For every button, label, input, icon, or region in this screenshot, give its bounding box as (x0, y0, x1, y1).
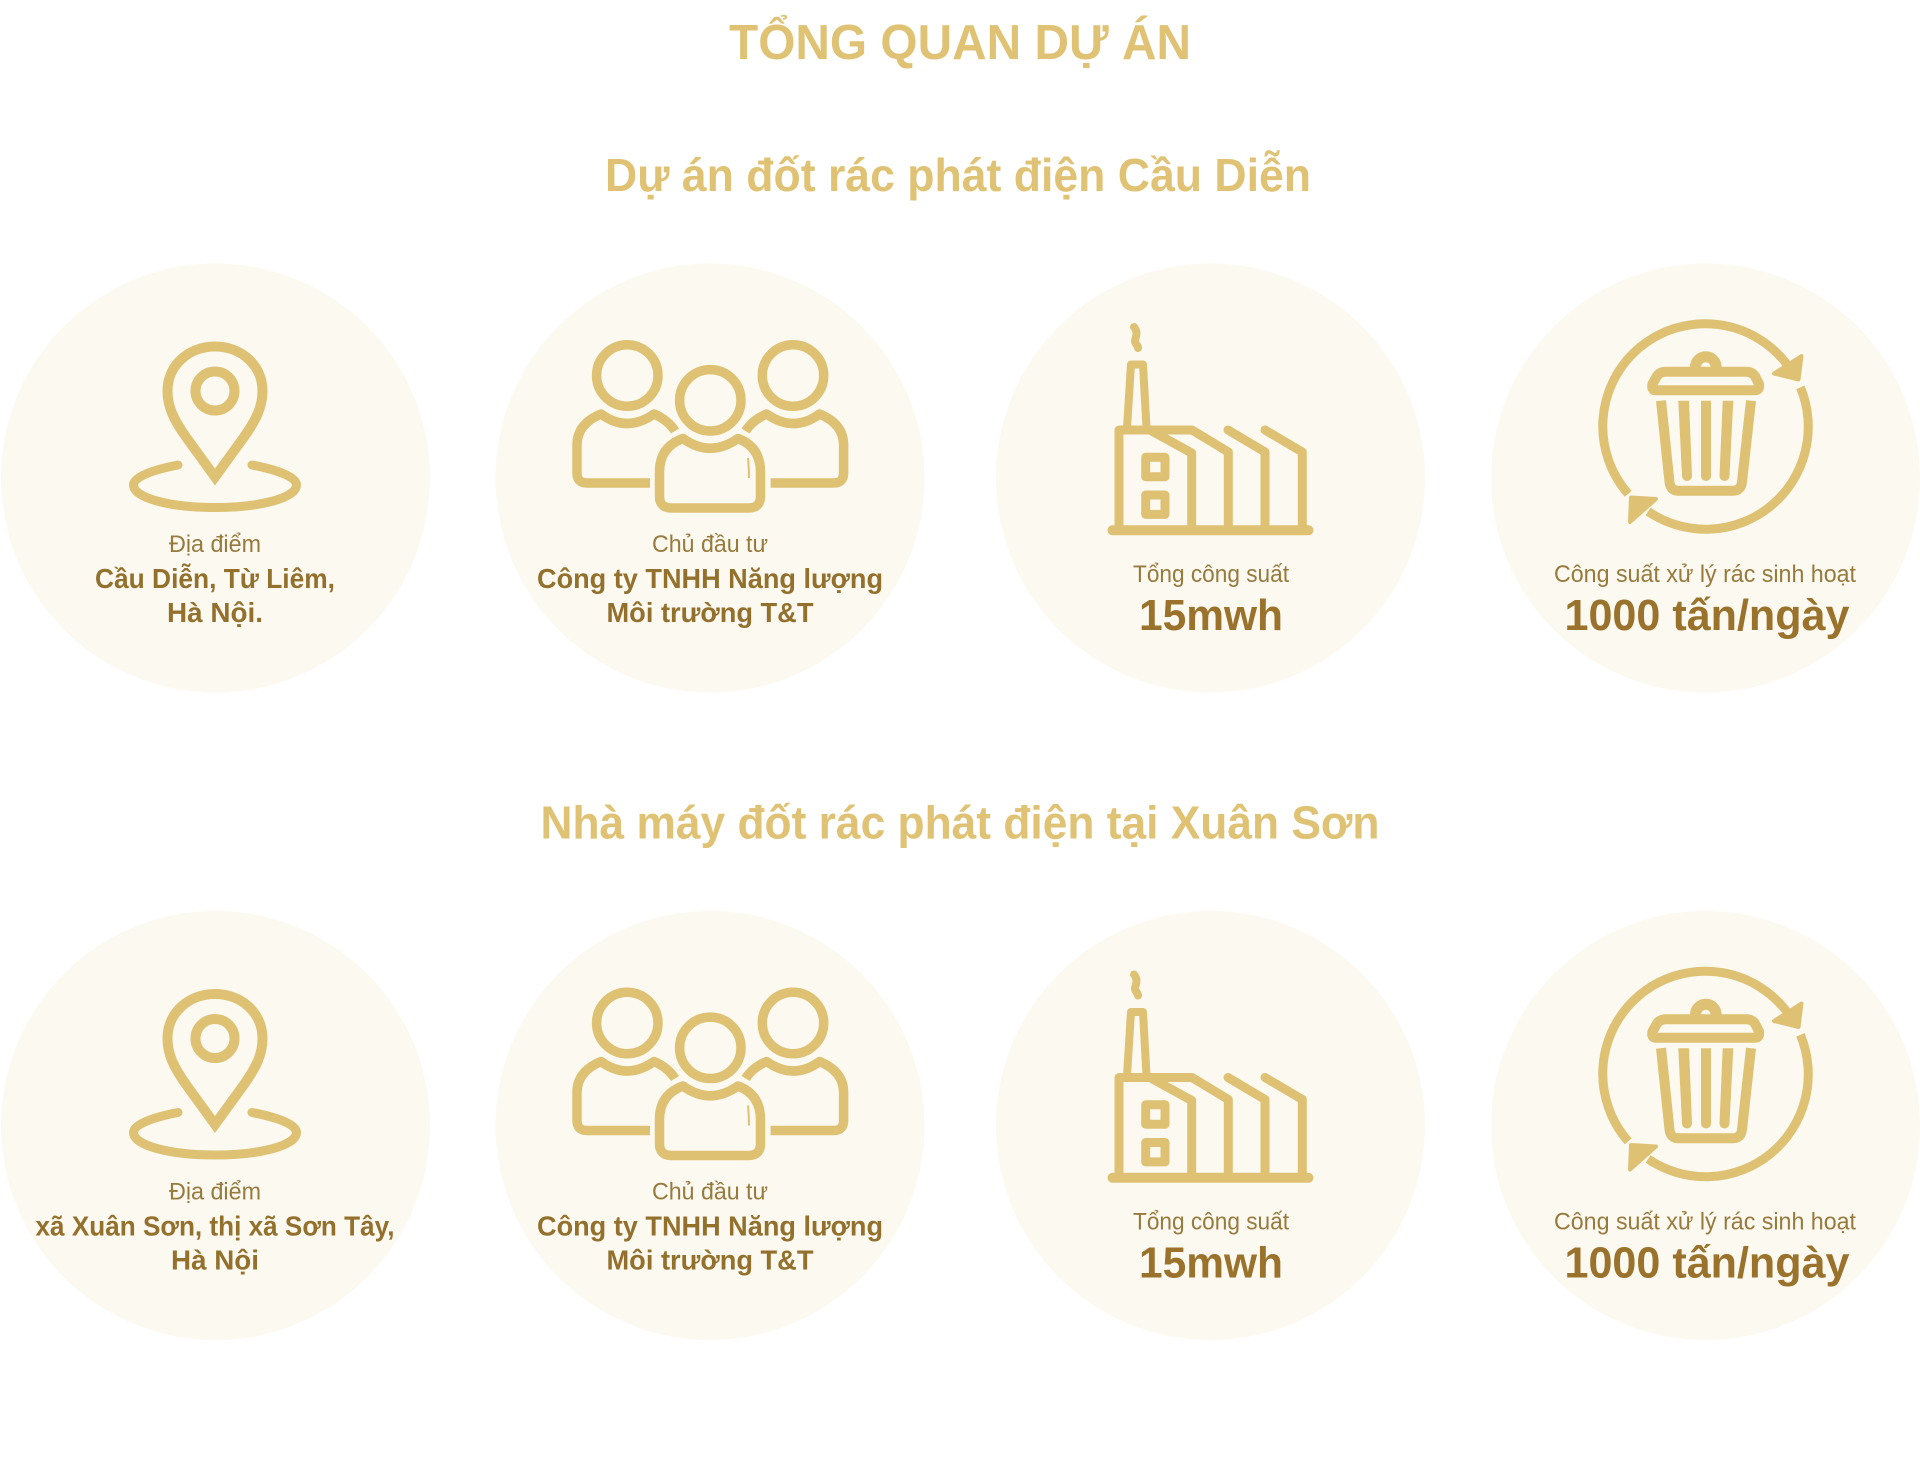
value: total capacity: 15mwh (1139, 591, 1283, 640)
panel: investor (496, 264, 924, 692)
heading: Cầu Diễn project: Dự án đốt rác phát điện Cầu Diễn (605, 149, 1311, 201)
icon: map pin (134, 346, 296, 508)
label: location: Địa điểm (169, 1178, 261, 1206)
label: total capacity: Tổng công suất (1133, 1208, 1289, 1236)
value: investor: Công ty TNHH Năng lượng (537, 563, 883, 594)
value: location: Hà Nội (171, 1244, 259, 1276)
label: waste capacity: Công suất xử lý rác sinh hoạt (1554, 561, 1856, 588)
label: location: Địa điểm (169, 531, 261, 558)
value: total capacity: 15mwh (1139, 1238, 1283, 1288)
value: investor: Môi trường T&T (606, 1244, 814, 1276)
title: TỔNG QUAN DỰ ÁN (729, 15, 1191, 70)
value: waste capacity: 1000 tấn/ngày (1564, 591, 1850, 640)
section: Cầu Diễn panels (1, 264, 1920, 692)
label: investor: Chủ đầu tư (652, 531, 768, 558)
label: investor: Chủ đầu tư (652, 1178, 768, 1206)
label: total capacity: Tổng công suất (1133, 561, 1289, 588)
heading: Xuân Sơn plant: Nhà máy đốt rác phát điện tại Xuân Sơn (540, 796, 1380, 848)
icon: people (577, 345, 844, 508)
icon: factory (1112, 327, 1308, 530)
panel: location (1, 911, 430, 1340)
section: Xuân Sơn panels (1, 911, 1920, 1340)
icon: people (577, 992, 844, 1156)
value: location: Cầu Diễn, Từ Liêm, (95, 563, 335, 594)
panel: total capacity (996, 264, 1425, 692)
value: investor (537, 563, 883, 628)
icon: recycling trash bin (1603, 324, 1808, 529)
panel: waste capacity (1491, 911, 1920, 1340)
value: location (36, 1210, 394, 1276)
panel: investor (496, 911, 924, 1340)
value: location (95, 563, 335, 628)
icon: map pin (134, 994, 296, 1155)
panel: location (1, 264, 430, 692)
value: investor: Môi trường T&T (606, 597, 814, 628)
label: waste capacity: Công suất xử lý rác sinh hoạt (1554, 1208, 1856, 1236)
value: investor (537, 1210, 883, 1276)
value: location: xã Xuân Sơn, thị xã Sơn Tây, (36, 1210, 394, 1242)
value: investor: Công ty TNHH Năng lượng (537, 1210, 883, 1242)
value: waste capacity: 1000 tấn/ngày (1564, 1238, 1850, 1288)
panel: total capacity (996, 911, 1425, 1340)
panel: waste capacity (1491, 264, 1920, 692)
icon: factory (1112, 974, 1308, 1178)
value: location: Hà Nội. (167, 597, 263, 628)
icon: recycling trash bin (1603, 971, 1808, 1177)
